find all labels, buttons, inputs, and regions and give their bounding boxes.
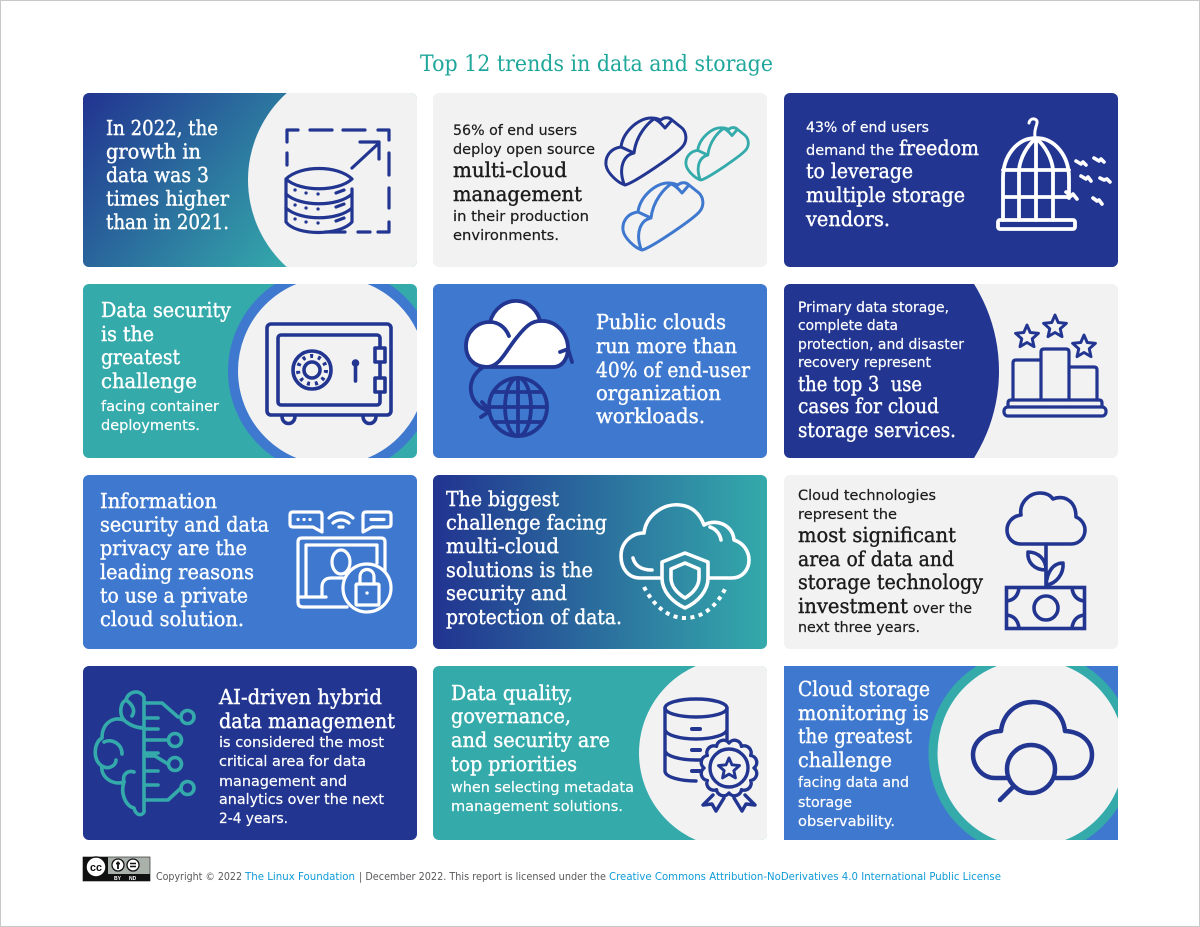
text: multi-cloud	[453, 123, 595, 244]
text: multi-cloud security: solutions is the	[446, 558, 593, 582]
text: multi-cloud: in their production	[453, 209, 589, 225]
text: private cloud: leading reasons	[100, 560, 254, 584]
panel: observability	[784, 666, 1118, 840]
footer: copyright	[156, 871, 1001, 883]
text: metadata management: when selecting metadata	[451, 780, 634, 796]
panel: freedom	[784, 93, 1118, 267]
text: top 3 use cases: recovery represent	[798, 355, 931, 371]
panel: technology investment	[784, 475, 1118, 649]
panel: data growth	[83, 93, 417, 267]
text: technology investment: represent the	[798, 507, 897, 523]
text: top 3 use cases: storage services.	[798, 418, 956, 442]
text: data security: greatest	[101, 345, 181, 369]
text: multi-cloud security	[446, 487, 622, 629]
text: AI-driven management: critical area for data	[219, 754, 366, 770]
text: observability: observability.	[798, 814, 895, 830]
icon: laptop user with lock	[290, 512, 391, 612]
text: public clouds: Public clouds	[596, 310, 726, 334]
icon: database with award badge	[665, 699, 757, 811]
text: AI-driven management: 2-4 years.	[219, 811, 288, 827]
text: observability: facing data and	[798, 775, 909, 791]
footer: copyright: | December 2022. This report is licensed under the	[359, 871, 606, 883]
icon: AI brain	[95, 692, 194, 815]
footer: copyright: Creative Commons Attribution-NoDerivatives 4.0 International Public License	[609, 871, 1001, 883]
text: top 3 use cases: cases for cloud	[798, 394, 939, 418]
text: data security: Data security	[101, 298, 231, 322]
text: data security: is the	[101, 322, 154, 346]
text: freedom: demand the	[806, 143, 894, 159]
text: data growth: data was 3	[106, 163, 209, 187]
icon: three isometric clouds	[606, 118, 748, 250]
text: multi-cloud: multi-cloud	[453, 158, 567, 182]
text: top 3 use cases: the top 3 use	[798, 372, 922, 396]
icon: podium and stars	[1004, 315, 1106, 416]
text: multi-cloud: environments.	[453, 228, 559, 244]
text: top 3 use cases: protection, and disaster	[798, 337, 964, 353]
text: data security: challenge	[101, 369, 197, 393]
icon: open birdcage and birds	[998, 119, 1110, 229]
text: multi-cloud security: The biggest	[446, 487, 560, 511]
text: metadata management: governance,	[451, 704, 571, 728]
text: metadata management: Data quality,	[451, 681, 573, 705]
text: AI-driven management: is considered the most	[219, 735, 384, 751]
text: metadata management: and security are	[451, 728, 610, 752]
icon: database in expanding box	[286, 130, 389, 232]
text: public clouds: 40% of end-user	[596, 358, 750, 382]
text: public clouds: organization	[596, 381, 721, 405]
text: technology investment: next three years.	[798, 620, 920, 636]
text: multi-cloud: 56% of end users	[453, 123, 577, 139]
text: observability: the greatest	[798, 724, 913, 748]
text: technology investment	[798, 488, 983, 636]
text: multi-cloud: deploy open source	[453, 142, 595, 158]
panel: public clouds	[433, 284, 767, 458]
text: data security: facing container	[101, 399, 219, 415]
text: AI-driven management: management and	[219, 774, 347, 790]
text: data security	[101, 298, 231, 434]
text: technology investment: most significant	[798, 523, 957, 547]
text: metadata management: management solutions.	[451, 799, 623, 815]
panel: metadata management	[433, 666, 767, 840]
text: multi-cloud security: challenge facing	[446, 510, 607, 534]
title: Top 12 trends in data and storage	[420, 51, 773, 77]
text: freedom	[805, 120, 979, 231]
text: technology investment: investment	[798, 594, 909, 618]
text: private cloud: privacy are the	[100, 536, 247, 560]
text: observability: challenge	[798, 748, 892, 772]
text: multi-cloud: management	[453, 182, 583, 206]
text: multi-cloud security: security and	[446, 581, 567, 605]
text: AI-driven management: AI-driven hybrid	[218, 685, 382, 709]
text: multi-cloud security: protection of data.	[446, 605, 622, 629]
text: data growth	[106, 116, 229, 234]
text: private cloud	[100, 489, 269, 631]
icon: safe	[267, 324, 391, 424]
text: private cloud: Information	[100, 489, 217, 513]
text: private cloud: to use a private	[100, 584, 248, 608]
text: data growth: In 2022, the	[106, 116, 218, 140]
footer: copyright: Copyright © 2022	[156, 871, 242, 883]
text: top 3 use cases	[798, 300, 964, 442]
panel: private cloud	[83, 475, 417, 649]
text: public clouds: workloads.	[596, 404, 705, 428]
text: private cloud: security and data	[100, 512, 269, 536]
text: AI-driven management: analytics over the next	[219, 792, 384, 808]
text: technology investment: Cloud technologies	[798, 488, 936, 504]
panel: AI-driven management	[83, 666, 417, 840]
text: observability	[798, 677, 930, 830]
panel: data security	[83, 284, 417, 458]
text: AI-driven management: data management	[219, 709, 396, 733]
text: technology investment: over the	[913, 601, 972, 617]
text: public clouds: run more than	[596, 334, 737, 358]
icon: cloud with magnifier	[973, 702, 1092, 800]
panel: multi-cloud	[433, 93, 767, 267]
text: data growth: times higher	[106, 186, 229, 210]
text: technology investment: storage technology	[798, 570, 983, 594]
text: multi-cloud security: multi-cloud	[446, 534, 559, 558]
footer: copyright: The Linux Foundation	[244, 871, 355, 883]
text: freedom: freedom	[899, 136, 979, 160]
text: data growth: growth in	[106, 140, 201, 164]
text: technology investment: area of data and	[798, 547, 954, 571]
badge: creative commons: ND	[129, 876, 137, 882]
panel: multi-cloud security	[433, 475, 767, 649]
panel: top 3 use cases	[784, 284, 1118, 458]
text: freedom: to leverage	[806, 159, 913, 183]
text: freedom: vendors.	[805, 207, 890, 231]
text: private cloud: cloud solution.	[100, 607, 244, 631]
text: freedom: multiple storage	[806, 183, 965, 207]
text: observability: Cloud storage	[798, 677, 930, 701]
text: top 3 use cases: complete data	[798, 318, 898, 334]
text: data security: deployments.	[101, 418, 200, 434]
text: metadata management: top priorities	[451, 752, 577, 776]
text: AI-driven management	[218, 685, 396, 827]
text: metadata management	[451, 681, 634, 815]
badge: creative commons: cc	[90, 862, 102, 874]
text: observability: monitoring is	[798, 701, 929, 725]
badge: creative commons: BY	[114, 876, 122, 882]
text: top 3 use cases: Primary data storage,	[798, 300, 949, 316]
text: public clouds	[596, 310, 750, 428]
icon: cloud with shield	[621, 505, 749, 618]
text: freedom: 43% of end users	[806, 120, 929, 136]
badge: creative commons	[83, 857, 150, 882]
text: observability: storage	[798, 795, 852, 811]
icon: cloud and globe	[466, 301, 572, 436]
icon: money plant cloud	[1006, 493, 1085, 628]
text: data growth: than in 2021.	[106, 210, 229, 234]
